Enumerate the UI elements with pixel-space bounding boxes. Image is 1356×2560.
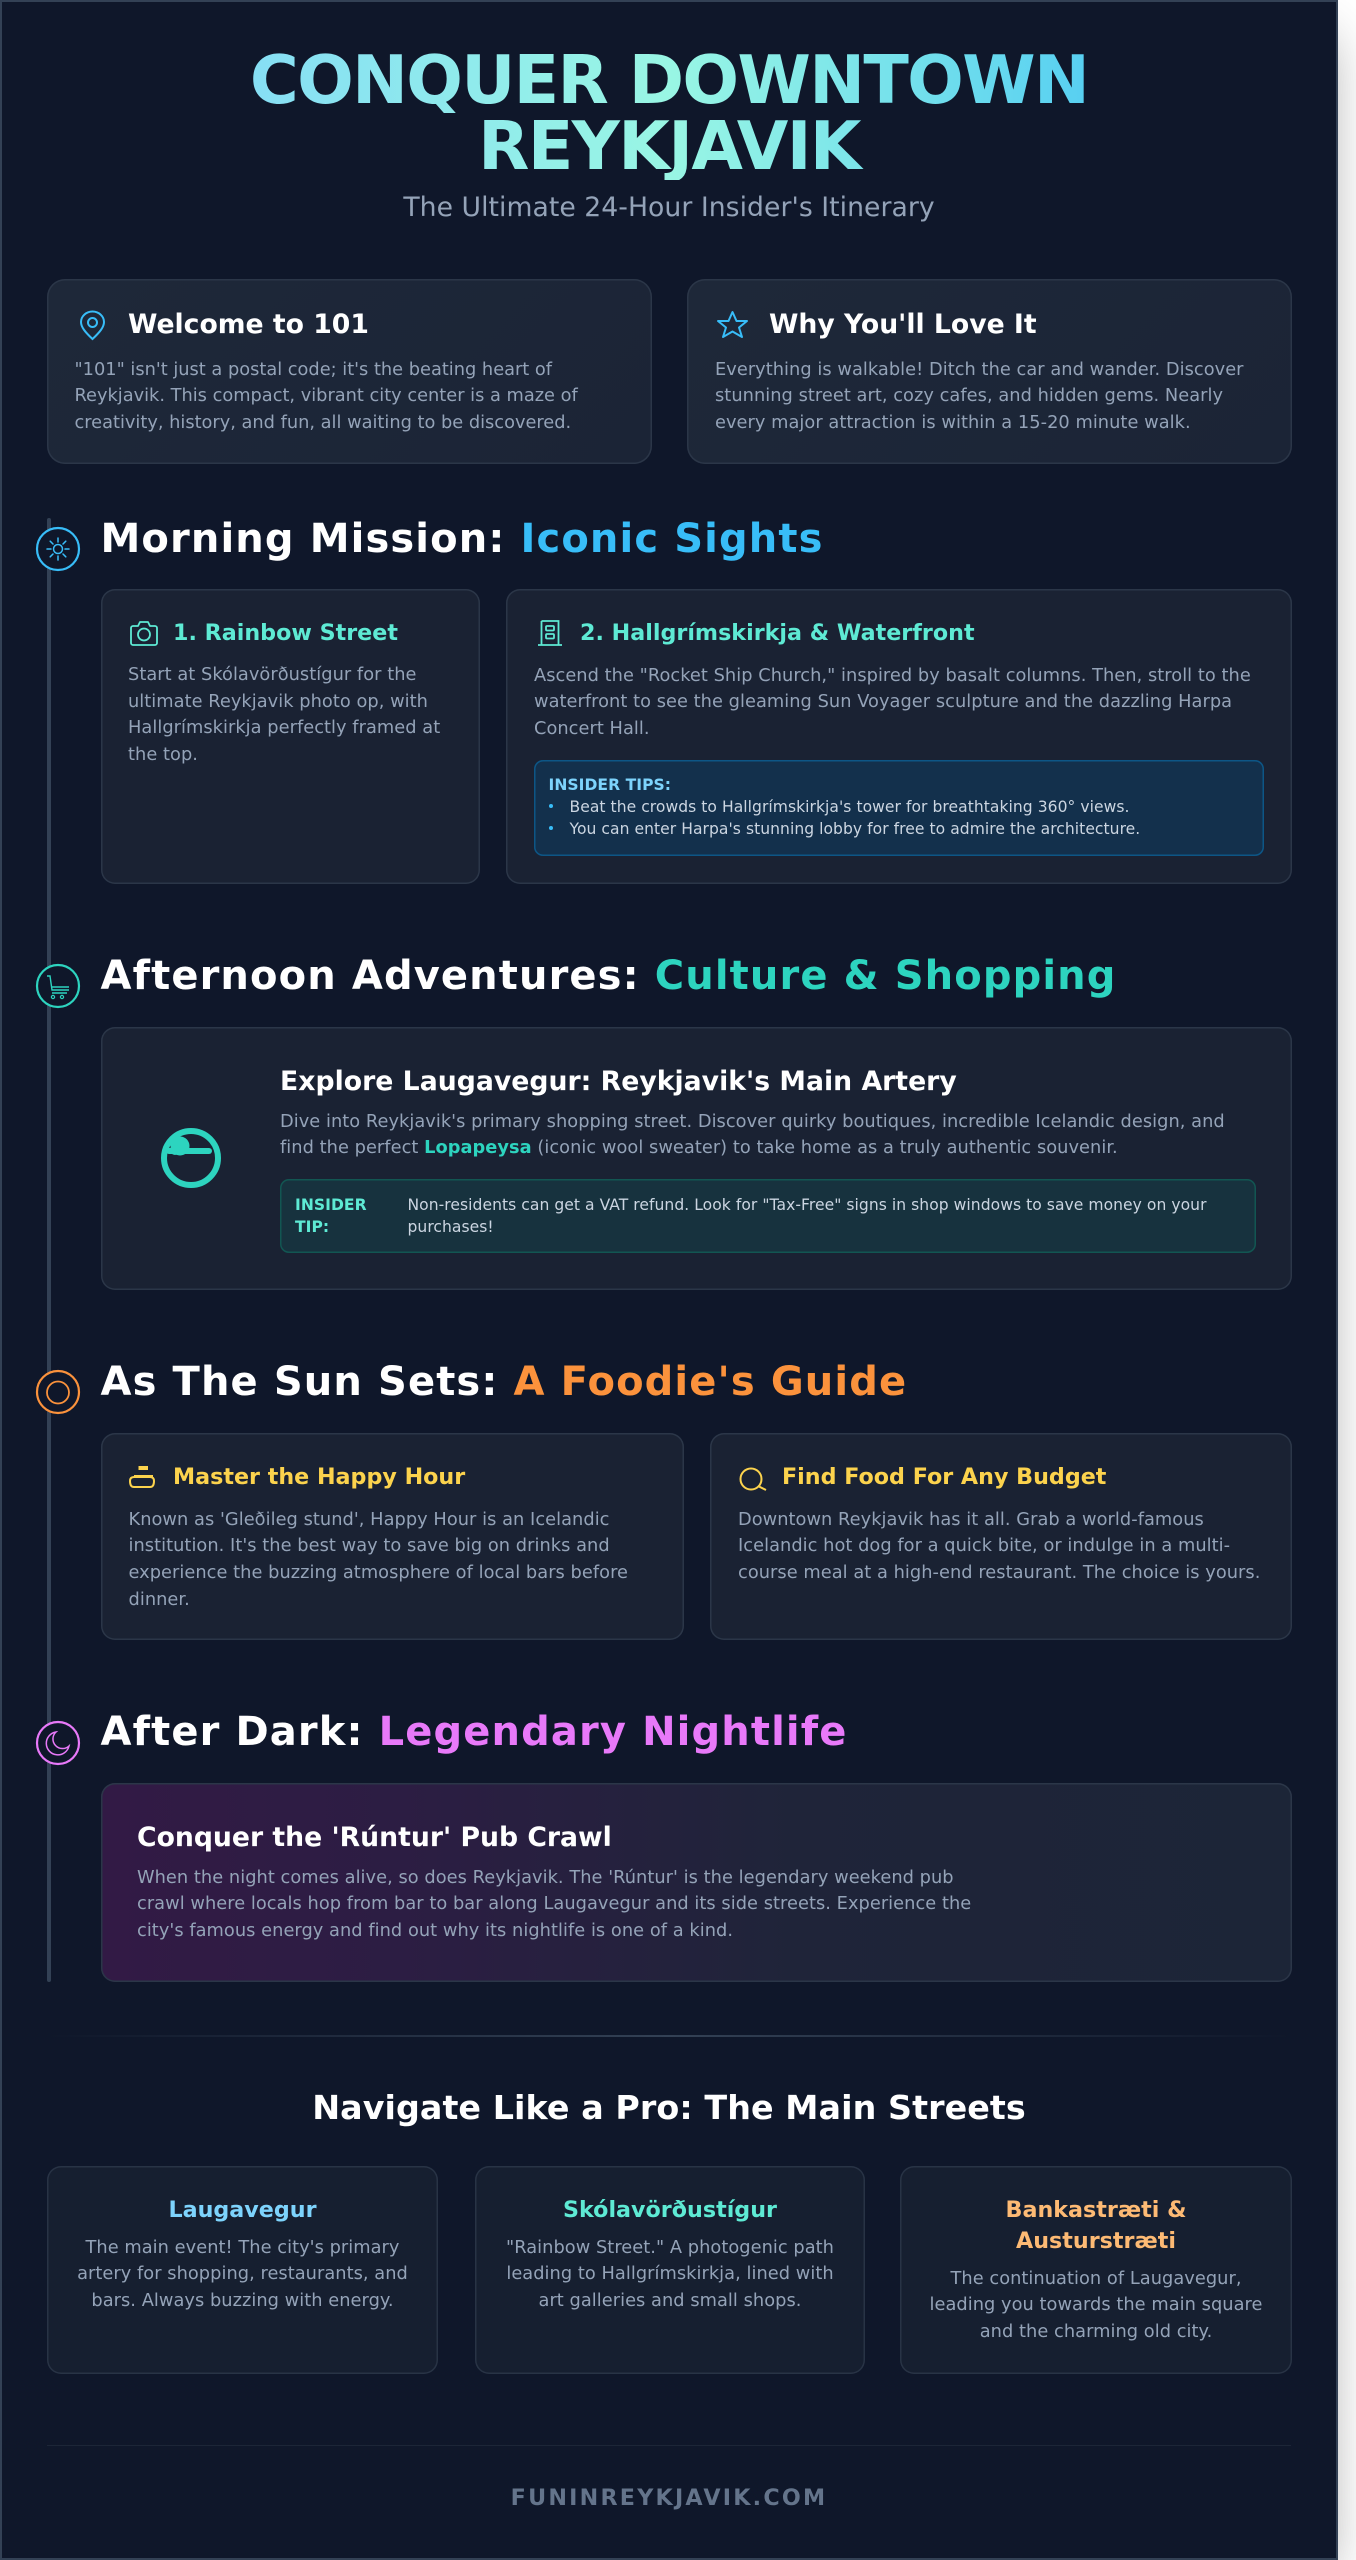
text: Icelandic hot dog for a quick bite, or indulge in a multi-: [738, 1535, 1230, 1556]
text: Start at Skólavörðustígur for the: [128, 664, 417, 685]
tip text: purchases!: [408, 1218, 494, 1236]
heading: navigate like a pro: Navigate Like a Pro: The Main Streets: [312, 2088, 1026, 2127]
tip bullet 2: [548, 826, 552, 830]
text: Dive into Reykjavik's primary shopping street. Discover quirky boutiques, incredible Icelandic design, and: [280, 1110, 1225, 1132]
text: Everything is walkable! Ditch the car and wander. Discover: [715, 358, 1244, 380]
heading: 1. Rainbow Street: [173, 620, 398, 646]
text: Ascend the "Rocket Ship Church," inspired by basalt columns. Then, stroll to the: [534, 664, 1251, 686]
timeline line: [47, 518, 51, 1982]
text: "101" isn't just a postal code; it's the beating heart of: [74, 358, 552, 380]
heading: after dark: After Dark: Legendary Nightlife: [100, 1709, 848, 1755]
title: CONQUER DOWNTOWN: [250, 41, 1088, 119]
title: REYKJAVIK: [478, 107, 860, 185]
text: institution. It's the best way to save big on drinks and: [128, 1535, 610, 1556]
text: ultimate Reykjavik photo op, with: [128, 691, 428, 712]
text: [738, 1508, 1260, 1583]
heading: Welcome to 101: [128, 308, 369, 340]
heading: Master the Happy Hour: [173, 1464, 465, 1490]
text: dinner.: [128, 1589, 190, 1610]
icon: timeline sunset: [36, 1370, 80, 1414]
text: [137, 1866, 971, 1941]
text: Concert Hall.: [534, 718, 650, 739]
street name: Skólavörðustígur: [563, 2197, 777, 2223]
panel: why you'll love it: [687, 279, 1292, 464]
callout: insider tips: [534, 760, 1264, 856]
heading: morning mission: Morning Mission: Iconic Sights: [100, 516, 824, 562]
panel: find food for any budget: [710, 1433, 1292, 1640]
panel: bankastraeti and austurstraeti: [900, 2166, 1292, 2374]
text: course meal at a high-end restaurant. The choice is yours.: [738, 1562, 1260, 1583]
heading: Find Food For Any Budget: [782, 1464, 1106, 1490]
text: Downtown Reykjavik has it all. Grab a world-famous: [738, 1508, 1204, 1530]
text: city's famous energy and find out why its nightlife is one of a kind.: [137, 1920, 733, 1941]
icon: drink: [129, 1466, 155, 1488]
panel: skolavordustigur: [475, 2166, 865, 2374]
text: [74, 358, 578, 433]
heading: Conquer the 'Rúntur' Pub Crawl: [137, 1822, 612, 1853]
text: [128, 664, 440, 765]
text: experience the buzzing atmosphere of local bars before: [128, 1562, 628, 1583]
tip 1: Beat the crowds to Hallgrímskirkja's tower for breathtaking 360° views.: [570, 798, 1130, 816]
text: leading you towards the main square: [930, 2294, 1262, 2315]
text: Reykjavik. This compact, vibrant city center is a maze of: [74, 385, 578, 406]
heading: afternoon adventures: Afternoon Adventures: Culture & Shopping: [100, 953, 1117, 999]
text: waterfront to see the gleaming Sun Voyager sculpture and the dazzling Harpa: [534, 691, 1232, 712]
text: Hallgrímskirkja perfectly framed at: [128, 717, 440, 738]
text: [280, 1110, 1225, 1158]
panel: rainbow street: [100, 589, 480, 884]
text: Known as 'Gleðileg stund', Happy Hour is an Icelandic: [128, 1508, 610, 1530]
tip bullet 1: [548, 804, 552, 808]
icon: star: [717, 311, 748, 338]
text: the top.: [128, 744, 198, 765]
text: [128, 1508, 628, 1610]
tip label: [295, 1196, 367, 1236]
panel: master the happy hour: [100, 1433, 684, 1640]
street name: Laugavegur: [168, 2197, 317, 2223]
panel: welcome to 101: [47, 279, 652, 464]
text: [77, 2236, 408, 2311]
tip label: TIP:: [295, 1218, 329, 1236]
text: The continuation of Laugavegur,: [950, 2268, 1242, 2288]
icon: timeline sun: [36, 526, 80, 572]
street name: Austurstræti: [1016, 2228, 1176, 2254]
street name: Bankastræti &: [1006, 2197, 1186, 2223]
tip label: INSIDER: [295, 1196, 367, 1214]
tips heading: INSIDER TIPS:: [548, 776, 671, 794]
title: [47, 47, 1291, 180]
panel: laugavegur: [47, 2166, 438, 2374]
subtitle: The Ultimate 24-Hour Insider's Itinerary: [403, 192, 935, 223]
tip text: Non-residents can get a VAT refund. Look for "Tax-Free" signs in shop windows to save money on your: [408, 1196, 1207, 1214]
text: The main event! The city's primary: [86, 2236, 399, 2258]
text: [506, 2236, 834, 2311]
footer: FUNINREYKJAVIK.COM: [511, 2485, 827, 2511]
tip text: [408, 1196, 1207, 1236]
heading: 2. Hallgrímskirkja & Waterfront: [580, 620, 975, 646]
icon: sweater badge: [161, 1128, 221, 1188]
text: stunning street art, cozy cafes, and hidden gems. Nearly: [715, 385, 1223, 406]
panel: explore laugavegur: [100, 1027, 1292, 1290]
callout: insider tip: [280, 1179, 1256, 1253]
text: crawl where locals hop from bar to bar along Laugavegur and its side streets. Experience the: [137, 1893, 971, 1914]
text: art galleries and small shops.: [539, 2290, 801, 2311]
text: "Rainbow Street." A photogenic path: [506, 2236, 834, 2258]
icon: map pin: [80, 310, 105, 340]
heading: Explore Laugavegur: Reykjavik's Main Artery: [280, 1066, 957, 1097]
text: leading to Hallgrímskirkja, lined with: [506, 2263, 834, 2284]
icon: search: [740, 1468, 766, 1491]
text: and the charming old city.: [980, 2321, 1212, 2342]
panel: runtur pub crawl: [100, 1783, 1292, 1982]
text: [534, 664, 1251, 739]
panel: hallgrimskirkja and waterfront: [506, 589, 1292, 884]
tip 2: You can enter Harpa's stunning lobby for free to admire the architecture.: [570, 820, 1140, 838]
heading: Why You'll Love It: [769, 308, 1037, 340]
heading: as the sun sets: As The Sun Sets: A Foodie's Guide: [100, 1359, 907, 1405]
text: creativity, history, and fun, all waiting to be discovered.: [74, 412, 571, 433]
text: every major attraction is within a 15-20 minute walk.: [715, 412, 1191, 433]
icon: camera: [130, 621, 158, 646]
street name: [1006, 2197, 1186, 2254]
text: find the perfect Lopapeysa (iconic wool sweater) to take home as a truly authentic souvenir.: [280, 1137, 1118, 1158]
text: [930, 2268, 1262, 2342]
text: artery for shopping, restaurants, and: [77, 2263, 408, 2284]
icon: building: [538, 620, 562, 646]
icon: timeline moon: [36, 1720, 80, 1766]
icon: timeline cart: [36, 964, 80, 1008]
text: bars. Always buzzing with energy.: [91, 2290, 394, 2311]
text: When the night comes alive, so does Reykjavik. The 'Rúntur' is the legendary weekend pub: [137, 1866, 954, 1888]
text: [715, 358, 1244, 433]
